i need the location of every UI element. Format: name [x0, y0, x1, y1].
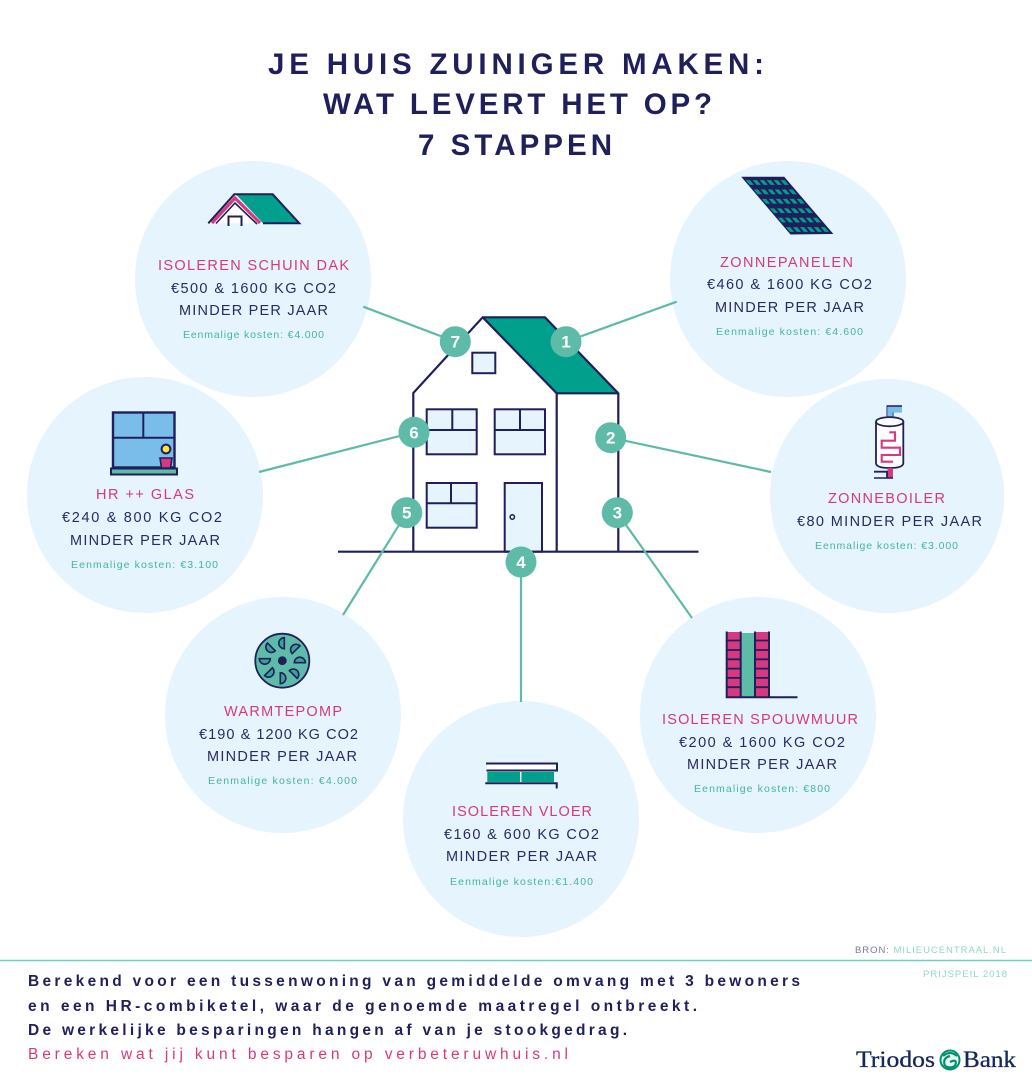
badge 2 [595, 422, 626, 453]
connector 2 [611, 438, 771, 472]
footer text: Bereken wat jij kunt besparen op verbeteruwhuis.nl [28, 1046, 568, 1063]
text block: €500 & 1600 KG CO2 [171, 281, 336, 297]
text block [62, 510, 222, 571]
panel: zonneboiler [770, 379, 1004, 613]
footer text: De werkelijke besparingen hangen af van je stookgedrag. [28, 1022, 627, 1039]
logo: Triodos Bank [856, 1047, 1017, 1072]
icon: solar boiler [874, 409, 903, 478]
skylight [472, 353, 495, 373]
ground line [338, 551, 698, 553]
footer text: en een HR-combiketel, waar de genoemde maatregel ontbreekt. [28, 998, 697, 1015]
badge 1 [550, 326, 582, 357]
heading: HR ++ GLAS [96, 487, 194, 503]
footer text [28, 973, 800, 1063]
panel: isoleren vloer [403, 701, 639, 937]
text block: €240 & 800 KG CO2 [62, 510, 222, 526]
text block: MINDER PER JAAR [446, 849, 597, 865]
connector 5 [343, 513, 407, 615]
window upper left [427, 409, 477, 454]
door [505, 483, 542, 552]
title: WAT LEVERT HET OP? [323, 88, 712, 121]
title: 7 STAPPEN [418, 129, 612, 162]
panel: zonnepanelen [670, 161, 906, 397]
heading: ISOLEREN SPOUWMUUR [662, 712, 858, 728]
connector 1 [566, 302, 677, 342]
logo: Triodos Bank: Triodos [856, 1047, 935, 1072]
heading: WARMTEPOMP [224, 704, 342, 720]
text block: Eenmalige kosten:€1.400 [450, 876, 593, 888]
text block: €460 & 1600 KG CO2 [707, 277, 872, 293]
title [268, 48, 764, 162]
text block: MINDER PER JAAR [715, 300, 864, 316]
heading: ZONNEPANELEN [720, 255, 853, 271]
badge 6 [398, 417, 430, 448]
text block: €200 & 1600 KG CO2 [679, 735, 845, 751]
badge 5: 5 [402, 504, 411, 523]
badge 5 [391, 497, 422, 528]
connector 4 [520, 562, 522, 702]
heading: ISOLEREN VLOER [452, 804, 592, 820]
badge 4: 4 [516, 553, 526, 572]
text block [199, 727, 358, 787]
connector 3 [617, 513, 692, 618]
text block: Eenmalige kosten: €3.000 [815, 540, 958, 552]
text block: Eenmalige kosten: €4.600 [716, 326, 863, 338]
text block: MINDER PER JAAR [207, 749, 357, 765]
text block: Eenmalige kosten: €800 [694, 783, 830, 795]
heading: ZONNEBOILER [828, 491, 945, 507]
text block: Eenmalige kosten: €4.000 [208, 775, 357, 787]
text block: MINDER PER JAAR [179, 303, 328, 319]
panel: hr++ glas [27, 377, 263, 613]
badge 6: 6 [409, 423, 419, 442]
text block [679, 735, 845, 795]
text block: €190 & 1200 KG CO2 [199, 727, 358, 743]
icon: roof [208, 194, 299, 226]
icon: floor [485, 764, 557, 788]
window lower left [427, 483, 477, 528]
text block: MINDER PER JAAR [70, 533, 220, 549]
price level note: PRIJSPEIL 2018 [923, 969, 1007, 980]
footer text: Berekend voor een tussenwoning van gemiddelde omvang met 3 bewoners [28, 973, 800, 990]
text block [171, 281, 336, 341]
badge 1: 1 [561, 333, 571, 352]
icon: solar panel [742, 177, 832, 234]
icon: window [111, 412, 177, 474]
text block [797, 514, 982, 552]
window upper right [495, 409, 545, 454]
text block: Eenmalige kosten: €4.000 [183, 329, 324, 341]
title: JE HUIS ZUINIGER MAKEN: [268, 48, 764, 81]
text block [444, 827, 599, 888]
heading: ISOLEREN SCHUIN DAK [158, 258, 349, 274]
badge 7: 7 [451, 333, 460, 352]
badge 2: 2 [606, 429, 615, 448]
connector 7 [363, 307, 455, 342]
panel: isoleren spouwmuur [640, 597, 876, 833]
logo: Triodos Bank: Bank [963, 1047, 1017, 1072]
text block: MINDER PER JAAR [687, 757, 837, 773]
source note: BRON: MILIEUCENTRAAL.NL [855, 945, 1006, 956]
connector 6 [259, 432, 414, 472]
text block: €160 & 600 KG CO2 [444, 827, 599, 843]
panel: warmtepomp [165, 597, 401, 833]
icon: heat pump [255, 634, 309, 688]
badge 3: 3 [613, 504, 622, 523]
text block [707, 277, 872, 338]
house illustration [338, 317, 698, 552]
badge 4 [506, 546, 536, 578]
badge 3 [602, 497, 633, 528]
icon: cavity wall [727, 632, 798, 697]
text block: Eenmalige kosten: €3.100 [71, 559, 218, 571]
panel: isoleren schuin dak [135, 161, 371, 397]
text block: €80 MINDER PER JAAR [797, 514, 982, 530]
badge 7 [440, 326, 471, 357]
